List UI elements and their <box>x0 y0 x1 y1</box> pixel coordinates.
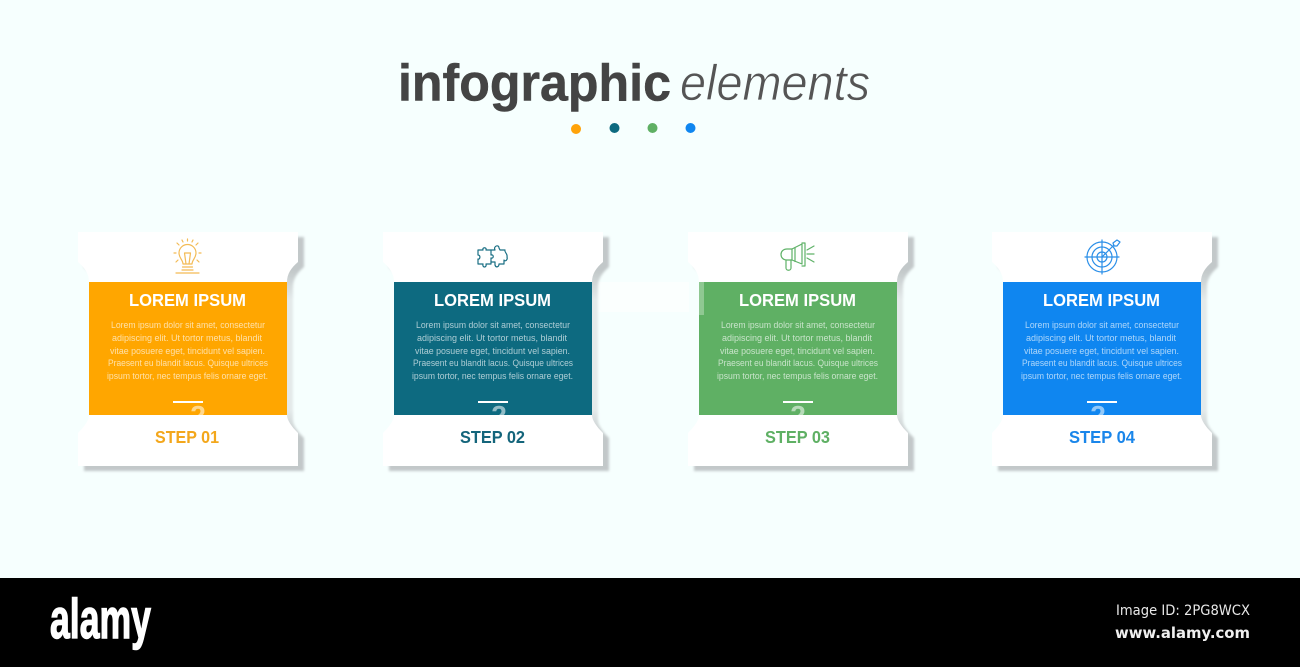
text block: vitae posuere eget, tincidunt vel sapien. <box>110 346 265 357</box>
step label: STEP 01 <box>155 427 219 447</box>
text block: Lorem ipsum dolor sit amet, consectetur <box>1025 320 1180 331</box>
divider and number <box>1087 401 1117 415</box>
text block <box>412 320 573 382</box>
panel: step 04 <box>992 232 1218 471</box>
text block <box>107 320 268 382</box>
step label: STEP 02 <box>460 427 525 447</box>
divider and number: 2 <box>491 400 507 431</box>
legend dots <box>571 123 696 134</box>
text block: ipsum tortor, nec tempus felis ornare eget. <box>107 371 268 382</box>
text block: ipsum tortor, nec tempus felis ornare eget. <box>412 371 573 382</box>
panel: step 03 <box>688 232 914 471</box>
text block: ipsum tortor, nec tempus felis ornare eget. <box>717 371 878 382</box>
text block: vitae posuere eget, tincidunt vel sapien. <box>415 346 570 357</box>
text block: adipiscing elit. Ut tortor metus, blandit <box>1026 333 1176 344</box>
text block: vitae posuere eget, tincidunt vel sapien. <box>1024 346 1179 357</box>
alamy logo: alamy <box>50 587 151 650</box>
text block <box>1021 320 1182 382</box>
heading: LOREM IPSUM <box>129 290 246 310</box>
divider and number: 2 <box>190 400 206 431</box>
text block: Lorem ipsum dolor sit amet, consectetur <box>111 320 266 331</box>
text block: vitae posuere eget, tincidunt vel sapien. <box>720 346 875 357</box>
heading: LOREM IPSUM <box>739 290 856 310</box>
icon: megaphone <box>781 243 814 270</box>
text block: Lorem ipsum dolor sit amet, consectetur <box>416 320 571 331</box>
divider and number: 2 <box>1090 400 1106 431</box>
divider and number <box>173 401 204 415</box>
text block: Praesent eu blandit lacus. Quisque ultrices <box>718 358 878 369</box>
text block: Praesent eu blandit lacus. Quisque ultrices <box>413 358 573 369</box>
text block: Praesent eu blandit lacus. Quisque ultrices <box>1022 358 1182 369</box>
icon: light bulb <box>174 239 201 273</box>
icon: puzzle <box>478 246 507 267</box>
panel: step 02 <box>383 232 609 471</box>
image id: Image ID: 2PG8WCX <box>1116 603 1250 619</box>
text block <box>717 320 878 382</box>
divider and number: 2 <box>790 400 806 431</box>
text block: adipiscing elit. Ut tortor metus, blandit <box>722 333 872 344</box>
text block: adipiscing elit. Ut tortor metus, blandit <box>112 333 262 344</box>
text block: Lorem ipsum dolor sit amet, consectetur <box>721 320 876 331</box>
website: www.alamy.com <box>1115 624 1250 642</box>
heading: LOREM IPSUM <box>434 290 551 310</box>
title: elements <box>680 55 870 111</box>
text block: Praesent eu blandit lacus. Quisque ultrices <box>108 358 268 369</box>
divider and number <box>478 401 508 415</box>
title <box>398 54 870 112</box>
text block: ipsum tortor, nec tempus felis ornare eget. <box>1021 371 1182 382</box>
title: infographic <box>398 54 671 112</box>
step label: STEP 04 <box>1069 427 1135 447</box>
watermark footer band <box>0 578 1300 667</box>
heading: LOREM IPSUM <box>1043 290 1160 310</box>
icon: target <box>1085 240 1120 274</box>
step label: STEP 03 <box>765 427 830 447</box>
panel: step 01 <box>78 232 304 471</box>
divider and number <box>783 401 813 415</box>
text block: adipiscing elit. Ut tortor metus, blandit <box>417 333 567 344</box>
